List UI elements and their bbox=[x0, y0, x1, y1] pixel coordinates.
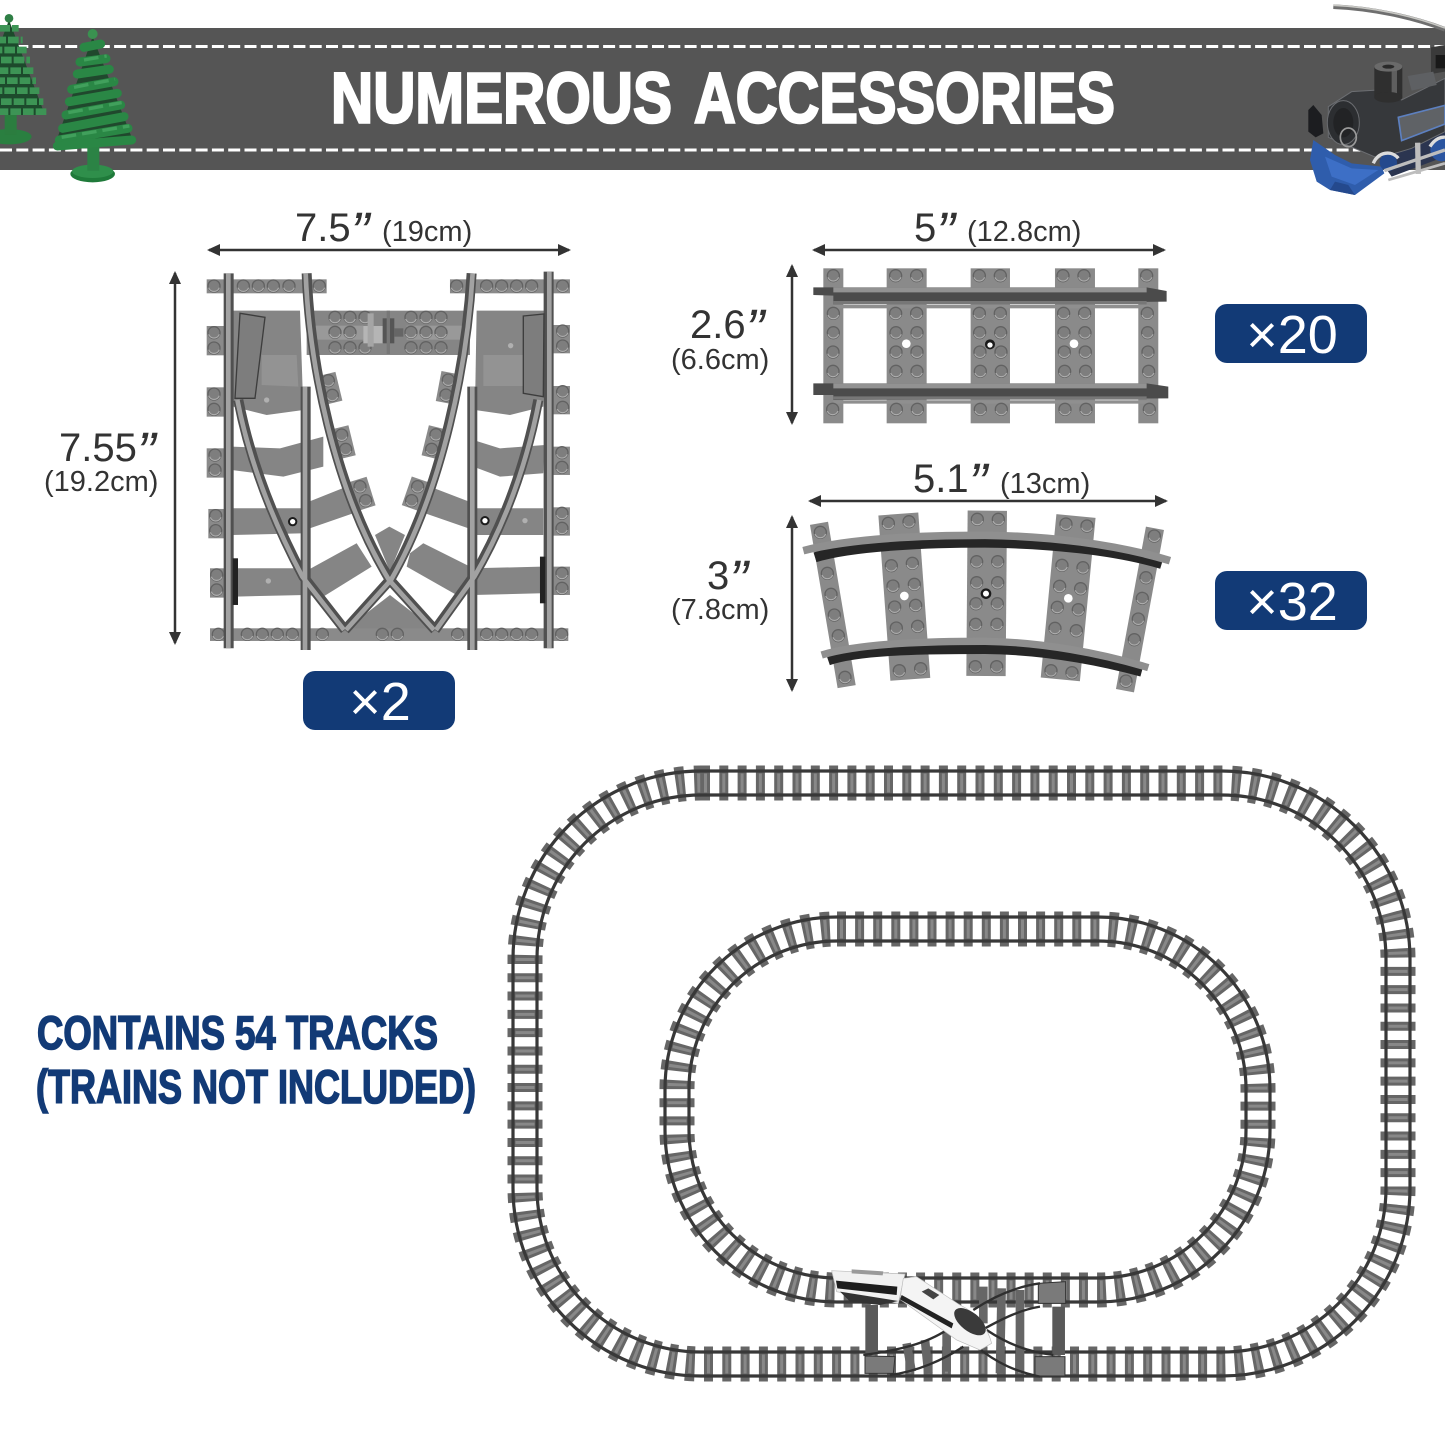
badge: x32 bbox=[1215, 571, 1367, 632]
switch blades bbox=[235, 313, 544, 398]
caption: contains 54 tracks: (TRAINS NOT INCLUDED) bbox=[36, 1060, 476, 1113]
dimension: curved height: 3 bbox=[707, 554, 729, 598]
straight track illustration bbox=[813, 268, 1168, 423]
track layout: crossover junction bbox=[832, 1269, 1066, 1377]
icon: large pine tree bbox=[55, 29, 133, 182]
dimension: switch width: 7.5 bbox=[295, 206, 351, 250]
dimension: straight width: (12.8cm) bbox=[967, 216, 1081, 248]
dimension: straight width: ” bbox=[936, 200, 957, 263]
dimension: curved width: 5.1 bbox=[913, 457, 969, 501]
dimension: curved height bbox=[671, 515, 798, 692]
track layout: outer loop bbox=[513, 771, 1410, 1376]
badge: x20 bbox=[1215, 304, 1367, 365]
caption: contains 54 tracks bbox=[36, 1006, 476, 1113]
dimension: straight height: (6.6cm) bbox=[671, 344, 769, 376]
panel: straight track piece bbox=[671, 200, 1367, 425]
dimension: switch width: ” bbox=[351, 200, 372, 263]
dimension: straight height: ” bbox=[746, 297, 767, 360]
model train bbox=[832, 1269, 992, 1350]
dimension: switch height: ” bbox=[137, 420, 158, 483]
dimension: curved height: (7.8cm) bbox=[671, 594, 769, 626]
dimension: curved height: ” bbox=[729, 548, 750, 611]
title: ACCESSORIES bbox=[694, 60, 1115, 138]
icon: steam locomotive bbox=[1308, 5, 1445, 195]
title bbox=[331, 60, 1115, 138]
badge: x20: ×20 bbox=[1246, 305, 1338, 365]
dimension: straight height bbox=[671, 264, 798, 425]
icon: small pine tree bbox=[0, 14, 47, 144]
dimension: switch width bbox=[207, 200, 571, 263]
dimension: switch height bbox=[44, 271, 181, 645]
dimension: straight width: 5 bbox=[914, 206, 936, 250]
curved track illustration bbox=[803, 511, 1170, 691]
dimension: switch height: (19.2cm) bbox=[44, 466, 158, 498]
badge: x2: ×2 bbox=[349, 672, 411, 732]
switch lever mechanism bbox=[363, 311, 403, 354]
rails bbox=[803, 535, 1170, 672]
dimension: straight height: 2.6 bbox=[690, 303, 746, 347]
dimension: switch width: (19cm) bbox=[382, 216, 472, 248]
caption: contains 54 tracks: CONTAINS 54 TRACKS bbox=[37, 1006, 438, 1059]
badge: x2 bbox=[303, 671, 455, 732]
dimension: curved width bbox=[808, 451, 1168, 514]
title: NUMEROUS bbox=[331, 60, 672, 138]
header band bbox=[0, 28, 1445, 170]
panel: switch track piece bbox=[44, 200, 571, 732]
dimension: curved width: (13cm) bbox=[1000, 468, 1090, 500]
badge: x32: ×32 bbox=[1246, 572, 1338, 632]
dimension: curved width: ” bbox=[969, 451, 990, 514]
dimension: switch height: 7.55 bbox=[59, 426, 137, 470]
dimension: straight width bbox=[812, 200, 1166, 263]
rails bbox=[813, 287, 1168, 400]
switch track illustration bbox=[207, 272, 570, 650]
mounting holes bbox=[264, 343, 528, 584]
panel: curved track piece bbox=[671, 451, 1367, 692]
track layout: inner loop bbox=[665, 917, 1270, 1302]
